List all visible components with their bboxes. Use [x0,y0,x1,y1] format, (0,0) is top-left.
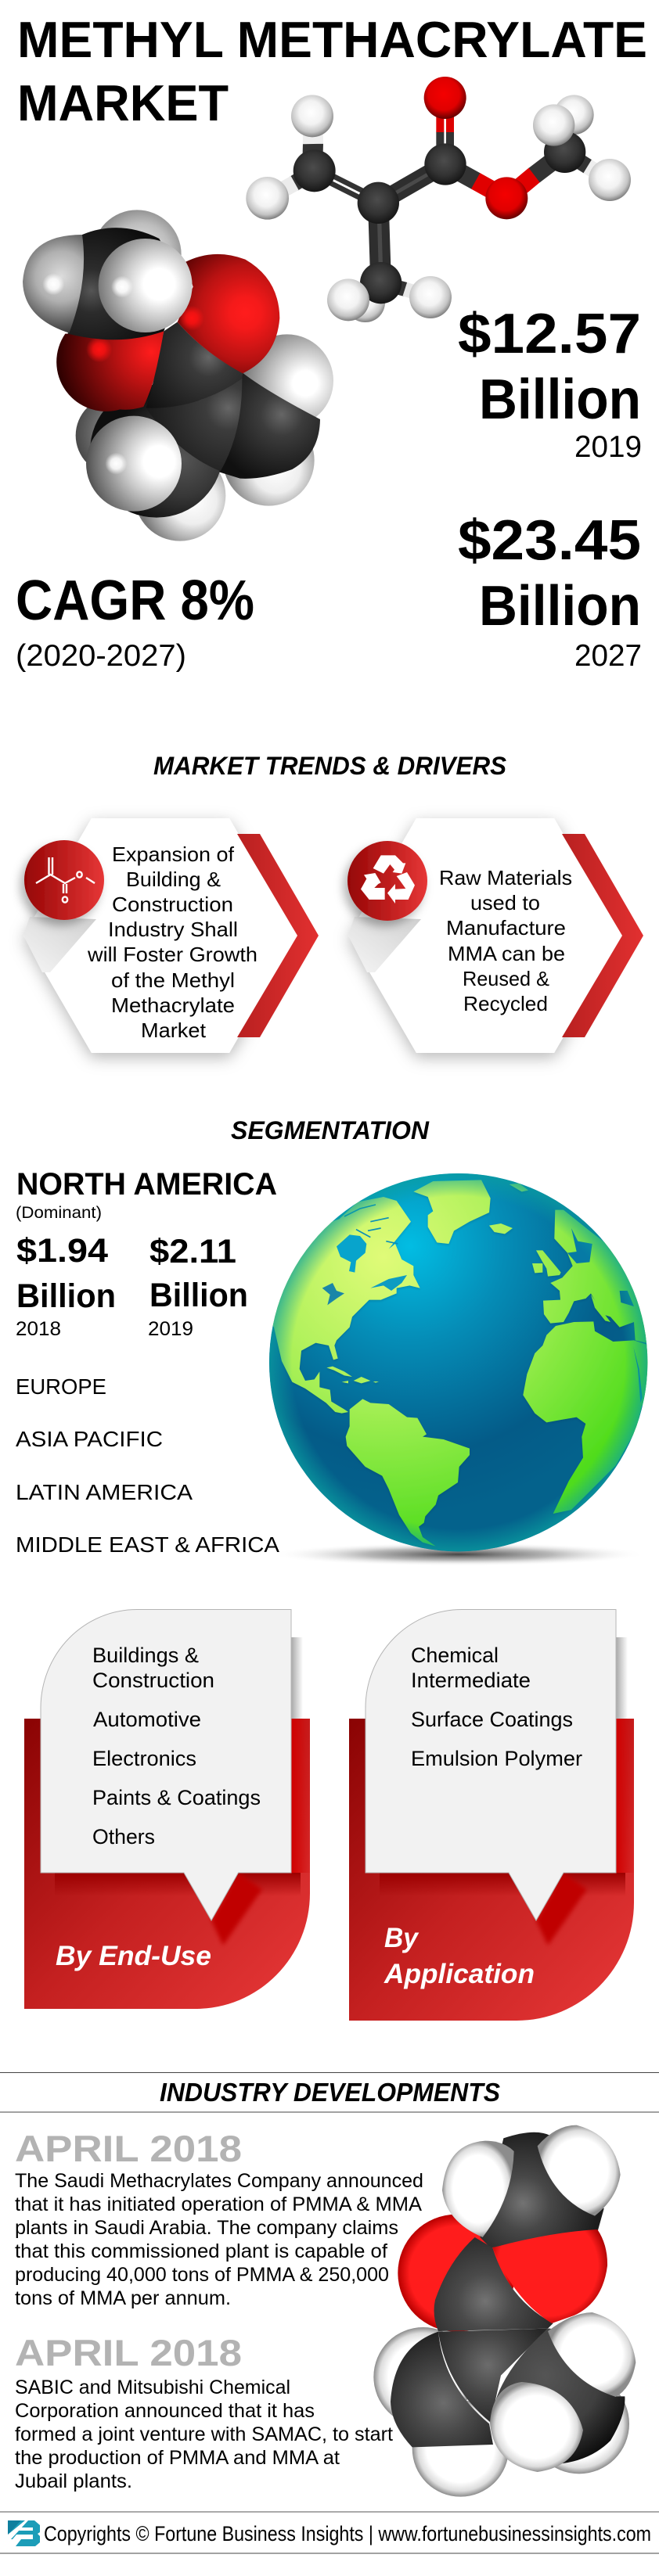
stat: 2019 market size: $12.57 [458,303,641,365]
development 1: that this commissioned plant is capable of [15,2240,387,2262]
driver 2 text: MMA can be [448,942,565,965]
icon: molecule formula [24,840,104,920]
development 1 [15,2128,423,2309]
driver 1 text [87,842,257,1042]
heading: market trends: MARKET TRENDS & DRIVERS [153,752,507,780]
title: MARKET [17,74,229,131]
driver 2 text: Manufacture [446,916,566,940]
end-use list: Others [92,1825,155,1848]
development 1: APRIL 2018 [15,2128,242,2169]
application list: Emulsion Polymer [411,1747,582,1770]
development 2: the production of PMMA and MMA at [15,2447,340,2469]
driver 1 text: Construction [112,893,233,916]
end-use list: Buildings & [92,1644,199,1667]
development 1: producing 40,000 tons of PMMA & 250,000 [15,2264,389,2286]
stat: CAGR: (2020-2027) [16,639,186,673]
driver 1 text: Building & [126,868,221,891]
icon: recycle [348,841,427,921]
stat: 2027 market size: $23.45 [458,509,641,572]
development 2: formed a joint venture with SAMAC, to start [15,2423,393,2445]
driver 1 text: Methacrylate [111,993,235,1017]
development 2: SABIC and Mitsubishi Chemical [15,2377,290,2398]
title: METHYL METHACRYLATE [17,11,647,68]
icon: ball and stick molecule [246,77,631,322]
heading: segmentation: SEGMENTATION [231,1116,430,1144]
end-use list: Automotive [93,1708,201,1731]
list: other regions [16,1374,279,1557]
application label: By [384,1923,419,1953]
application list [411,1644,582,1770]
driver 2 text: Reused & [463,967,549,990]
icon: space filling molecule 2 [373,2125,636,2497]
panel: by application [349,1610,634,2021]
stat: 2019 market size [458,303,642,464]
block: North America values [16,1167,277,1340]
stat: 2019 market size: Billion [479,368,641,431]
end-use list: Electronics [92,1747,196,1770]
end-use label: By End-Use [56,1941,211,1971]
block: North America values: Billion [149,1277,248,1314]
stat: CAGR [16,569,254,673]
icon: globe [266,1173,657,1566]
stat: 2027 market size: 2027 [574,639,642,673]
development 2: Jubail plants. [15,2470,132,2492]
development 2 [15,2332,393,2492]
stat: 2019 market size: 2019 [574,430,642,464]
development 2: APRIL 2018 [15,2332,242,2373]
panel: by end-use [24,1610,310,2009]
development 1: tons of MMA per annum. [15,2287,231,2309]
stat: CAGR: CAGR 8% [16,569,254,632]
panel: driver 1 [23,818,319,1053]
block: North America values: 2018 [16,1318,61,1340]
application label: Application [384,1959,535,1989]
end-use list [92,1644,261,1848]
driver 2 text: Raw Materials [439,866,572,889]
development 1: that it has initiated operation of PMMA & MMA [15,2193,422,2215]
driver 2 text: used to [470,891,540,914]
development 1: plants in Saudi Arabia. The company claims [15,2217,398,2239]
driver 1 text: Industry Shall [108,918,238,941]
list: other regions: MIDDLE EAST & AFRICA [16,1532,279,1557]
heading: industry developments: INDUSTRY DEVELOPMENTS [160,2078,500,2107]
end-use list: Construction [92,1669,214,1692]
driver 1 text: Market [141,1019,207,1042]
title [17,11,647,131]
block: North America values: 2019 [148,1318,193,1340]
application list: Intermediate [411,1669,531,1692]
application list: Chemical [411,1644,499,1667]
stat: 2027 market size [458,509,642,673]
list: other regions: ASIA PACIFIC [16,1427,163,1451]
stat: 2027 market size: Billion [479,575,641,638]
driver 2 text: Recycled [463,992,548,1015]
panel: driver 2 [348,818,643,1053]
block: North America values: NORTH AMERICA [16,1167,277,1202]
block: North America values: Billion [16,1277,116,1315]
icon: logo [8,2520,40,2546]
driver 1 text: will Foster Growth [87,943,257,966]
footer [0,2512,659,2553]
driver 1 text: of the Methyl [111,968,235,992]
development 2: Corporation announced that it has [15,2400,315,2422]
driver 2 text [439,866,572,1015]
block: North America values: $2.11 [149,1233,236,1270]
icon: space filling molecule [23,210,333,541]
list: other regions: LATIN AMERICA [16,1480,193,1504]
block: North America values: $1.94 [16,1232,108,1270]
application list: Surface Coatings [411,1708,573,1731]
block: North America values: (Dominant) [16,1204,102,1222]
driver 1 text: Expansion of [112,842,235,866]
development 1: The Saudi Methacrylates Company announced [15,2170,423,2192]
list: other regions: EUROPE [16,1374,106,1399]
end-use list: Paints & Coatings [92,1786,261,1809]
application label [384,1923,535,1989]
